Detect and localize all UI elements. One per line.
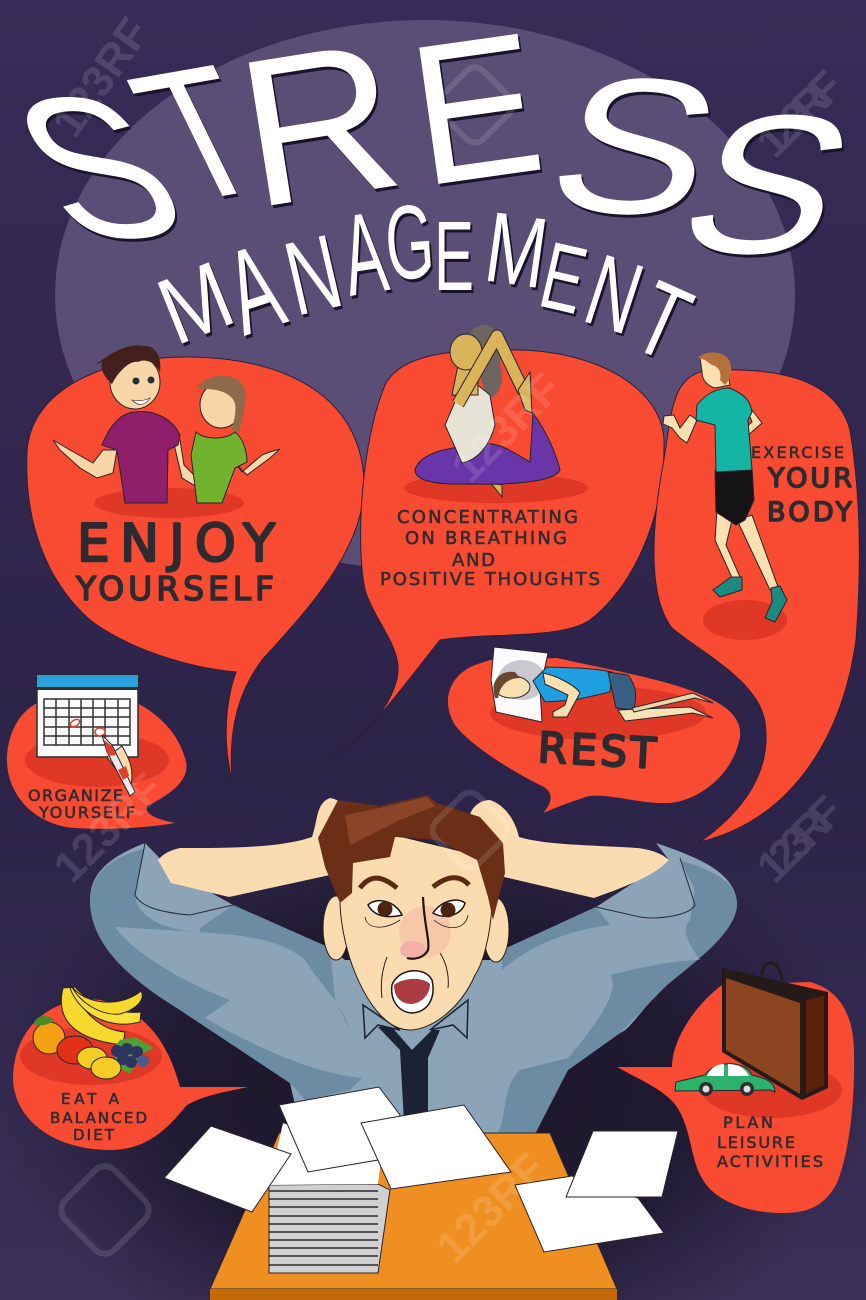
icon: yoga pose [404,325,588,503]
text: exercise your body: BODY [767,497,852,528]
text: concentrating on breathing [380,507,600,590]
title: STRESS: S [528,33,743,259]
panel: rest bubble [448,647,740,813]
text: plan leisure activities: LEISURE [717,1133,795,1152]
forearm: left [158,798,347,897]
face [340,835,492,1030]
nose [407,897,428,959]
subtitle: MANAGEMENT: N [573,234,655,356]
watermarks: 123RF [43,9,159,146]
text: exercise your body: EXERCISE [751,443,844,462]
hair [318,795,505,920]
text: exercise your body: YOUR [767,463,852,494]
ears [323,896,349,960]
eyes [368,901,402,917]
subtitle: MANAGEMENT: G [381,183,438,303]
shirt [90,843,737,1140]
stressed man [90,795,737,1140]
text: plan leisure activities: PLAN [723,1113,773,1132]
text: organize yourself [28,786,135,822]
text: eat a balanced diet [50,1090,147,1144]
text: concentrating on breathing: AND [452,550,495,571]
forearm: right [469,800,669,898]
panel: concentrating bubble [328,325,664,760]
title: STRESS [0,0,866,297]
icon: fruits [20,987,162,1085]
title: STRESS: R [224,0,414,253]
icon: suitcase and car [675,963,842,1118]
subtitle: MANAGEMENT: N [275,213,352,339]
mouth [392,971,433,1013]
subtitle: MANAGEMENT: A [334,186,395,321]
collar [363,1000,468,1038]
text: eat a balanced diet: BALANCED [50,1109,147,1127]
scattered papers [164,1087,678,1252]
icon: friends [53,345,280,518]
subtitle: MANAGEMENT: T [619,260,706,384]
heading: yourself: YOURSELF [75,569,274,608]
text: concentrating on breathing: POSITIVE THOUGHTS [380,569,600,590]
text: plan leisure activities [717,1113,823,1171]
title: STRESS: T [104,26,295,241]
panel: organize yourself bubble [7,675,187,829]
text: eat a balanced diet: DIET [73,1126,115,1144]
desk [210,1133,617,1300]
subtitle: MANAGEMENT: E [434,202,474,312]
watermarks: 123RF [747,62,853,167]
subtitle: MANAGEMENT: M [144,241,247,365]
panel: exercise bubble [654,352,859,842]
text: organize yourself: ORGANIZE [28,786,123,805]
icon: runner [663,352,787,640]
watermarks: 123RF [427,1144,555,1272]
subtitle: MANAGEMENT [144,183,706,384]
icon: sleeping man [490,647,713,740]
text: exercise your body [751,443,852,528]
watermarks: 123RF [442,364,570,492]
panel: leisure bubble [617,963,854,1213]
paper stack [269,1123,390,1273]
icon: calendar [25,675,169,796]
panel: balanced diet bubble [13,987,248,1150]
spotlight ellipse [55,20,795,570]
text: eat a balanced diet: EAT A [61,1090,120,1108]
text: organize yourself: YOURSELF [38,803,135,822]
text: concentrating on breathing: ON BREATHING [405,528,567,549]
tie [378,1025,440,1140]
subtitle: MANAGEMENT: E [531,221,596,334]
panel: enjoy yourself bubble [27,345,364,780]
text: plan leisure activities: ACTIVITIES [717,1152,823,1171]
subtitle: MANAGEMENT: M [479,191,554,310]
subtitle: MANAGEMENT: A [210,217,298,360]
watermarks: 123RF [44,764,172,892]
heading: rest: REST [537,723,658,778]
heading: enjoy: ENJOY [77,514,275,574]
text: concentrating on breathing: CONCENTRATING [397,507,578,528]
watermarks: 123RF [747,787,853,892]
